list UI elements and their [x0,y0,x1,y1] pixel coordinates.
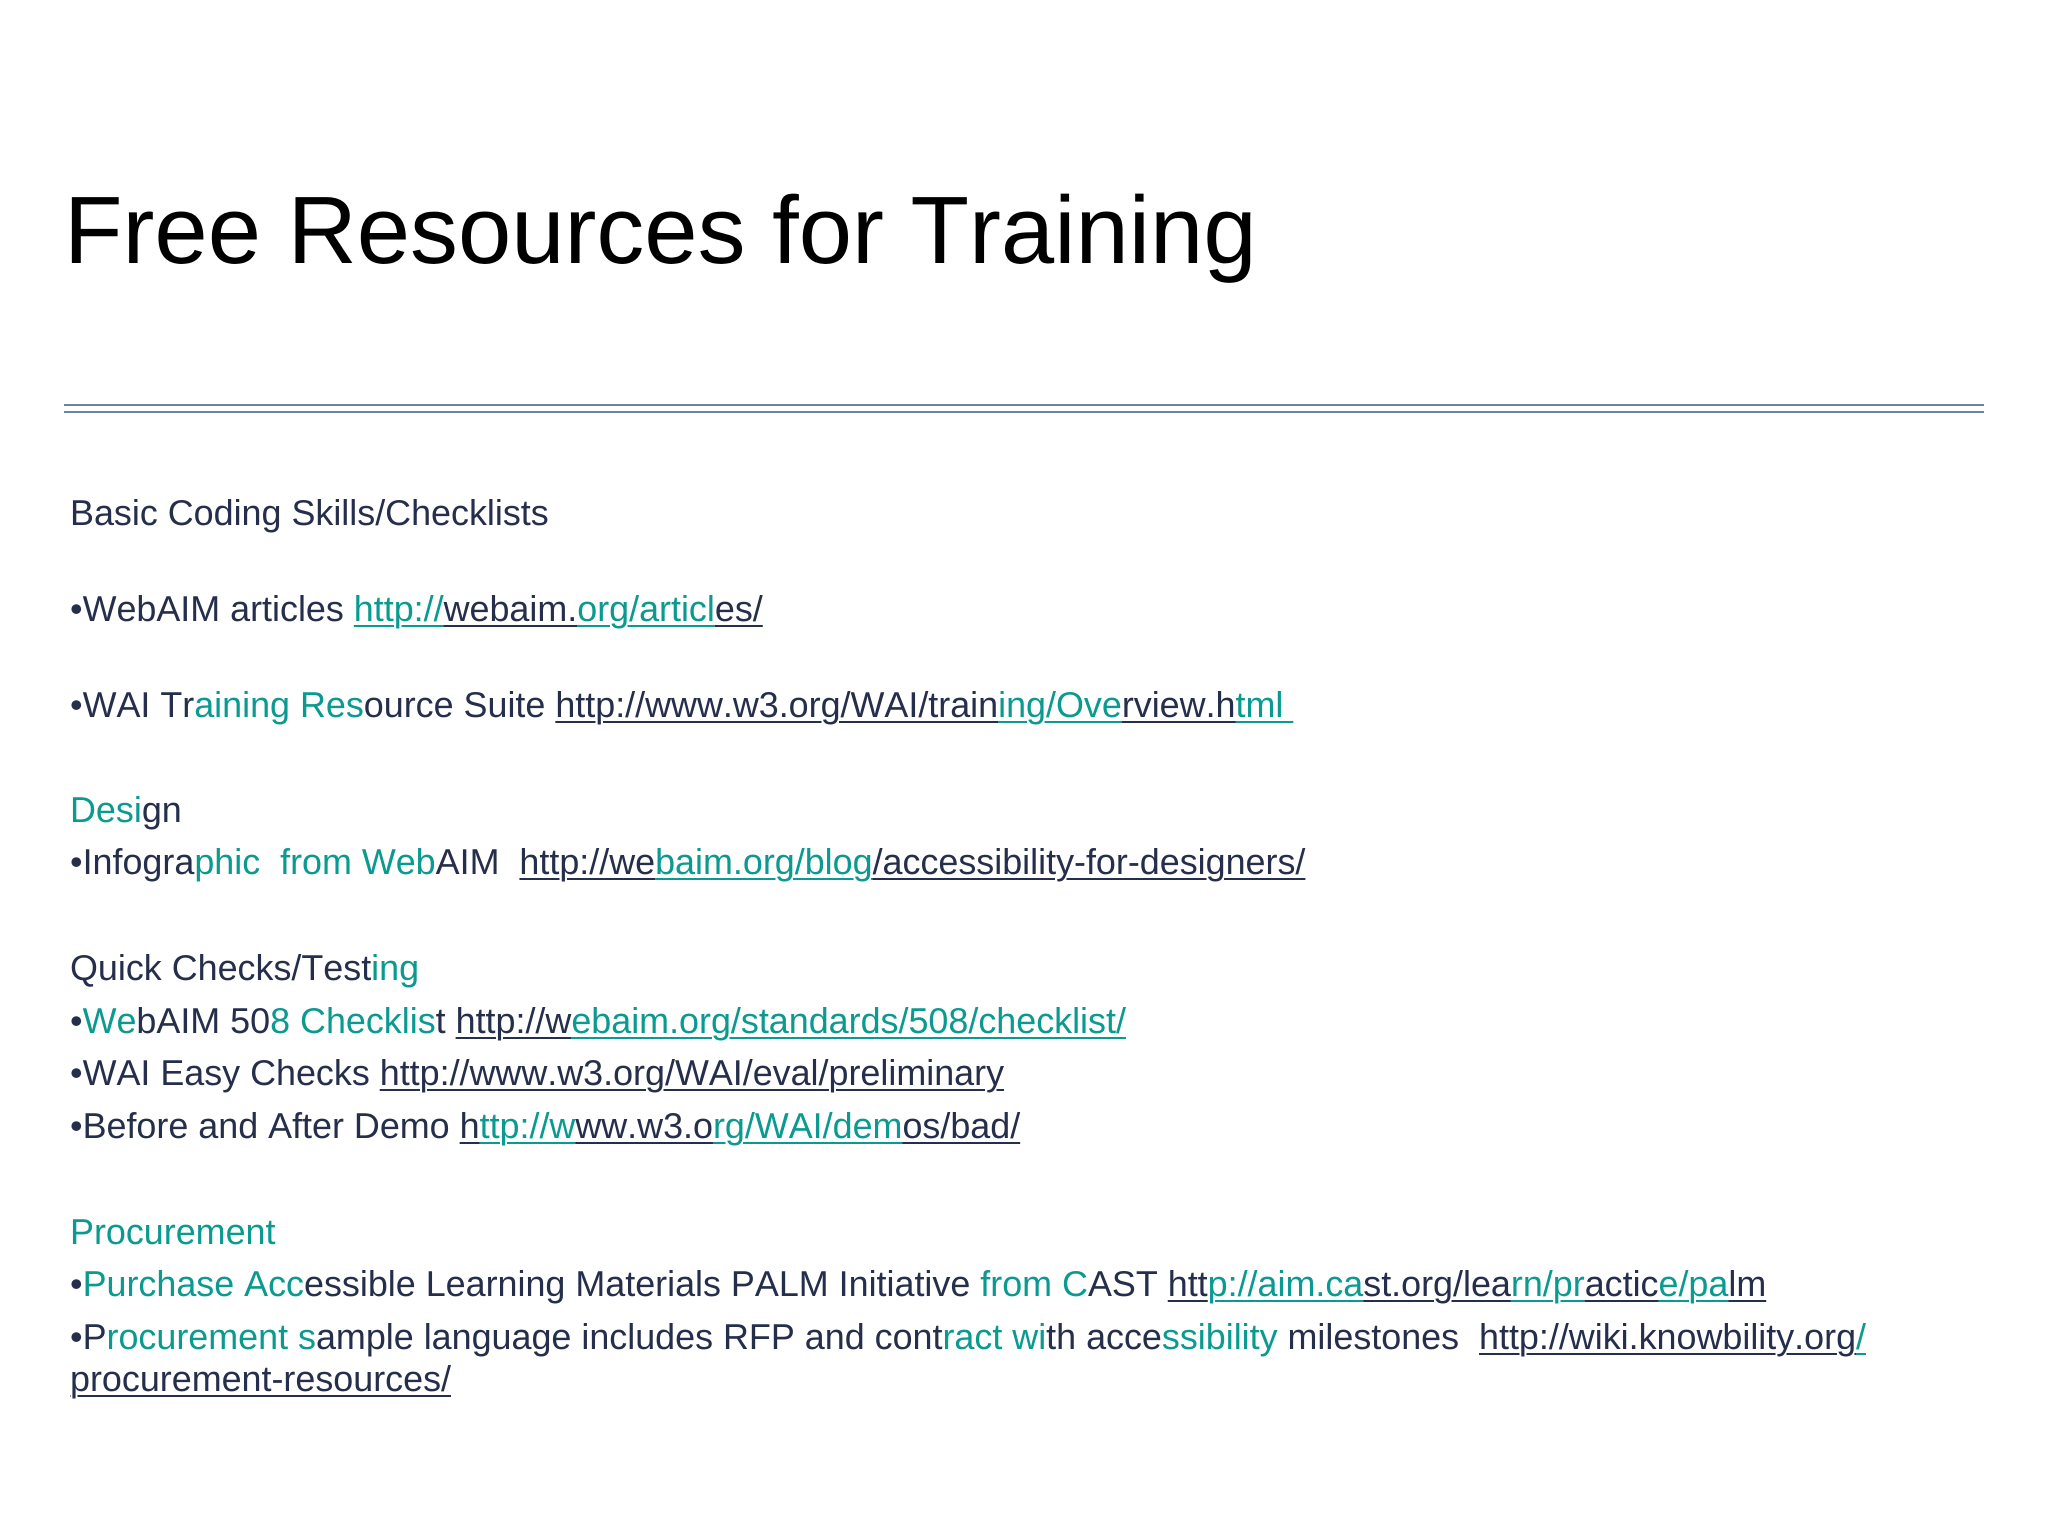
link item: infographic from WebAIM: •Infographic from WebAIM http://webaim.org/blog/accessibility-for-designers/ [70,842,1305,882]
section: design [70,790,1306,882]
section: basic coding skills [70,493,1294,725]
link item: WebAIM articles: •WebAIM articles http://webaim.org/articles/ [70,589,763,629]
heading: procurement: Procurement [70,1212,275,1252]
section: quick checks and testing [70,948,1126,1146]
heading: design: Design [70,790,182,830]
title: Free Resources for Training [64,177,1257,284]
link item: WAI training resource suite: •WAI Training Resource Suite http://www.w3.org/WAI/training/Overview.html [70,685,1283,725]
link item: procurement sample language: procurement-resources/ [70,1359,451,1399]
link item: WebAIM 508 checklist: •WebAIM 508 Checklist http://webaim.org/standards/508/checklist/ [70,1001,1126,1041]
link item: procurement sample language: •Procurement sample language includes RFP and contract with accessibility milestones http://wiki.knowbility.org/ [70,1317,1866,1357]
link item: PALM initiative: •Purchase Accessible Learning Materials PALM Initiative from CAST http://aim.cast.org/learn/practice/palm [70,1264,1766,1304]
link item: before and after demo: •Before and After Demo http://www.w3.org/WAI/demos/bad/ [70,1106,1020,1146]
link item: procurement sample language [70,1317,1866,1399]
heading: quick checks/testing: Quick Checks/Testing [70,948,419,988]
section: procurement [70,1212,1866,1399]
heading: basic coding skills/checklists: Basic Coding Skills/Checklists [70,493,549,533]
link item: WAI easy checks: •WAI Easy Checks http://www.w3.org/WAI/eval/preliminary [70,1053,1004,1093]
